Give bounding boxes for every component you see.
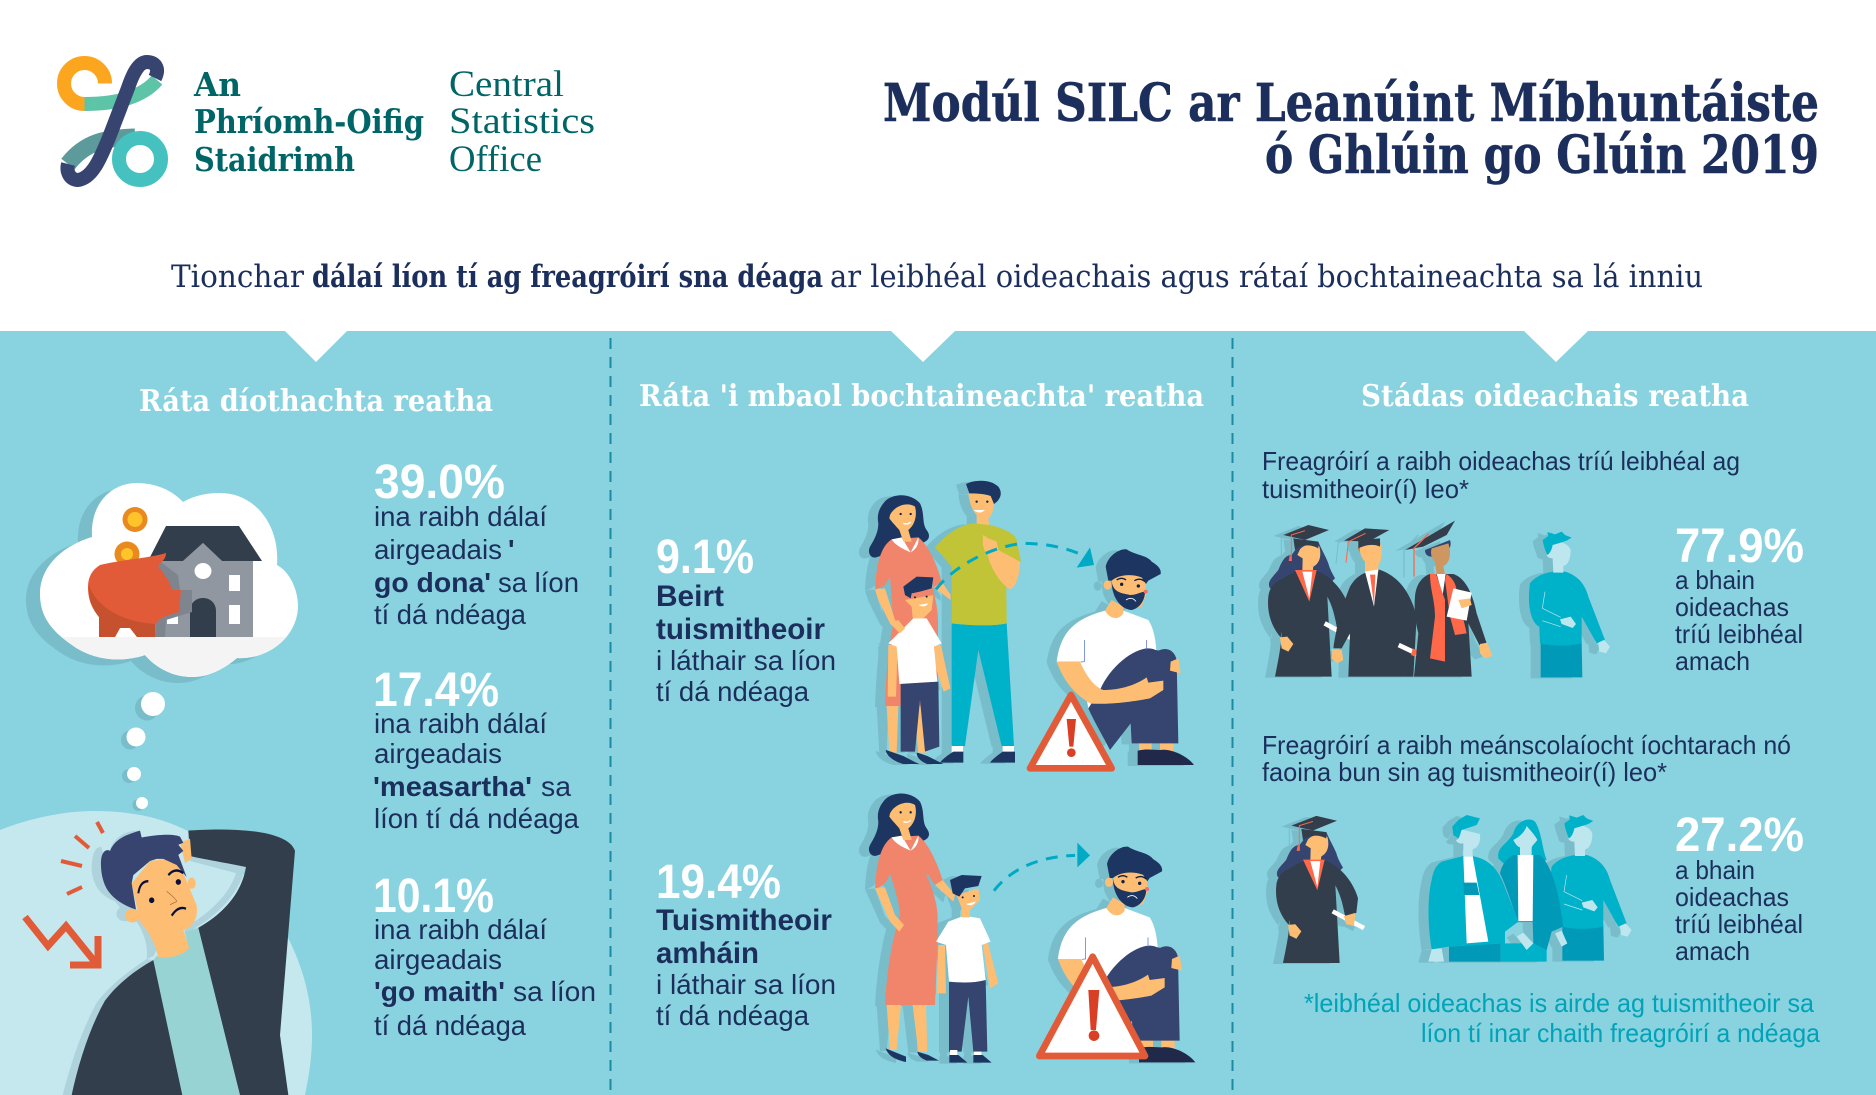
subtitle: dálaí líon tí ag freagróirí sna déaga: [312, 259, 823, 295]
deprivation stat 1: 39.0%: [374, 456, 505, 509]
deprivation stat 2: 17.4%: [373, 664, 499, 717]
footnote: *leibhéal oideachas is airde ag tuismitheoir sa: [1304, 988, 1815, 1018]
poverty stat: one parent: amháin: [656, 937, 759, 970]
thought bubbles: [121, 692, 165, 811]
subtitle: [171, 259, 1703, 295]
icon: warning triangle, upper: [1030, 695, 1112, 768]
poverty stat: two parents: tí dá ndéaga: [656, 676, 810, 707]
text: lower-secondary parents: faoina bun sin ag tuismitheoir(í) leo*: [1262, 757, 1667, 787]
logo wordmark: English: Office: [449, 139, 542, 180]
text: third-level parents: [1262, 446, 1740, 504]
heading: current deprivation: Ráta díothachta reatha: [139, 384, 493, 419]
poverty stat: one parent: 19.4%: [656, 856, 781, 909]
stat: 27.2 percent: [1675, 809, 1804, 966]
illustration: thought cloud with piggy bank and house: [26, 483, 310, 687]
illustration: one-parent family: [869, 794, 998, 1063]
logo wordmark: English: Central: [449, 64, 564, 105]
deprivation stat 1: ina raibh dálaí: [374, 501, 547, 532]
subtitle: Tionchar: [171, 259, 304, 295]
logo mark: [64, 62, 161, 180]
deprivation stat 1: [374, 456, 579, 630]
poverty stat: one parent: i láthair sa líon: [656, 969, 836, 1000]
icon: falling arrow: [25, 917, 98, 965]
logo wordmark: Irish: Phríomh-Oifig: [194, 102, 424, 141]
stat: 27.2 percent: tríú leibhéal: [1675, 909, 1803, 939]
stat: 77.9 percent: [1675, 520, 1804, 676]
text: third-level parents: tuismitheoir(í) leo*: [1262, 474, 1469, 504]
deprivation stat 2: ina raibh dálaí: [374, 708, 547, 739]
illustration: teal non-graduate person: [1529, 532, 1610, 677]
footnote: líon tí inar chaith freagróirí a ndéaga: [1421, 1018, 1821, 1048]
arrow: one-parent to poverty risk: [994, 843, 1090, 891]
stat: 27.2 percent: 27.2%: [1675, 809, 1804, 862]
poverty stat: two parents: i láthair sa líon: [656, 645, 836, 676]
logo wordmark: Irish: An: [193, 65, 241, 104]
deprivation stat 1: sa líon: [498, 567, 579, 598]
icon: warning triangle, lower: [1039, 957, 1145, 1056]
text: lower-secondary parents: Freagróirí a raibh meánscolaíocht íochtarach nó: [1262, 730, 1791, 760]
poverty stat: two parents: tuismitheoir: [656, 613, 825, 646]
deprivation stat 3: 'go maith': [374, 976, 505, 1007]
deprivation stat 3: 10.1%: [373, 870, 494, 923]
deprivation stat 3: ina raibh dálaí: [374, 914, 547, 945]
deprivation stat 2: sa: [541, 771, 572, 802]
illustration: worried man: [63, 829, 295, 1095]
illustration: seated man, upper: [1057, 549, 1194, 765]
poverty stat: one parent: [656, 856, 836, 1031]
deprivation stat 1: airgeadais: [374, 534, 502, 565]
stat: 27.2 percent: amach: [1675, 936, 1750, 966]
deprivation stat 2: líon tí dá ndéaga: [374, 803, 580, 834]
footnote: [1304, 988, 1821, 1048]
stat: 27.2 percent: oideachas: [1675, 882, 1789, 912]
deprivation stat 1: ': [508, 534, 515, 565]
deprivation stat 1: go dona': [374, 567, 491, 598]
stat: 77.9 percent: oideachas: [1675, 592, 1789, 622]
text: lower-secondary parents: [1262, 730, 1791, 787]
deprivation stat 3: airgeadais: [374, 944, 502, 975]
heading: at risk of poverty: Ráta 'i mbaol bochtaineachta' reatha: [639, 379, 1204, 414]
logo wordmark: English: Statistics: [449, 101, 595, 142]
deprivation stat 2: airgeadais: [374, 738, 502, 769]
illustration: seated man, lower: [1058, 847, 1195, 1062]
deprivation stat 3: [373, 870, 596, 1041]
poverty stat: two parents: Beirt: [656, 580, 724, 613]
logo wordmark: English: [449, 64, 595, 180]
title: [883, 73, 1819, 186]
illustration: single graduate: [1276, 816, 1364, 963]
deprivation stat 2: [373, 664, 580, 834]
illustration: three teal non-graduates: [1428, 815, 1632, 962]
deprivation stat 3: sa líon: [513, 976, 596, 1007]
poverty stat: one parent: tí dá ndéaga: [656, 1000, 810, 1031]
heading: education status: Stádas oideachais reatha: [1361, 379, 1749, 414]
stat: 77.9 percent: tríú leibhéal: [1675, 619, 1803, 649]
stat: 27.2 percent: a bhain: [1675, 855, 1755, 885]
background blob behind man: [0, 811, 312, 1095]
arrow: two-parent to poverty risk: [936, 543, 1094, 589]
illustration: two-parent family: [869, 481, 1021, 764]
poverty stat: two parents: 9.1%: [656, 531, 754, 584]
stat: 77.9 percent: amach: [1675, 646, 1750, 676]
logo wordmark: Irish: Staidrimh: [194, 140, 355, 179]
stat: 77.9 percent: 77.9%: [1675, 520, 1804, 573]
subtitle: ar leibhéal oideachais agus rátaí bochtaineachta sa lá inniu: [830, 259, 1703, 295]
deprivation stat 2: 'measartha': [373, 771, 532, 802]
poverty stat: one parent: Tuismitheoir: [656, 904, 832, 937]
column dividers: [610, 338, 1232, 1095]
logo wordmark: Irish: [193, 65, 424, 179]
poverty stat: two parents: [656, 531, 836, 707]
stat: 77.9 percent: a bhain: [1675, 565, 1755, 595]
deprivation stat 3: tí dá ndéaga: [374, 1010, 527, 1041]
deprivation stat 1: tí dá ndéaga: [374, 599, 527, 630]
teal content band with notches: [0, 331, 1876, 1095]
text: third-level parents: Freagróirí a raibh oideachas tríú leibhéal ag: [1262, 446, 1740, 476]
illustration: three graduates: [1268, 521, 1492, 677]
stress marks: [61, 822, 103, 894]
